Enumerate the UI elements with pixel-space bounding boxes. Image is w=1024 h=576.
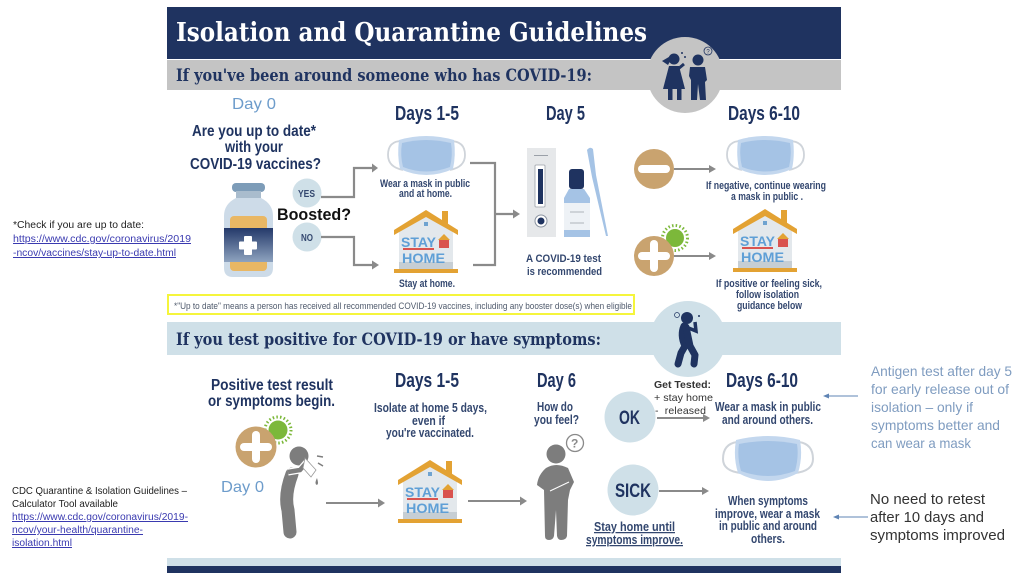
caption: if positive: follow isolation [736,289,799,301]
caption: how do you feel: How do [537,400,573,414]
caption: when symptoms improve: in public and around [719,519,817,533]
icon: stay home house: HOME [741,249,784,265]
icon: negative result [634,149,674,189]
side note: check up to date: *Check if you are up to date: [13,220,144,231]
annotation: get tested: + stay home [654,392,713,404]
caption: wear mask around others [715,400,821,427]
arrow: to isolate [326,498,385,508]
caption: test recommended: A COVID-19 test [526,253,601,265]
question: up to date: COVID-19 vaccines? [190,156,321,173]
heading: Days 6-10: Days 6-10 [728,103,800,125]
icon: positive result with virus [634,226,688,276]
caption: isolate at home [374,401,487,440]
section heading: exposed to COVID-19: If you've been around someone who has COVID-19: [176,66,592,85]
caption: how do you feel: you feel? [534,413,579,427]
footer band [167,558,841,573]
arrow: to day 6 [468,496,527,506]
caption: isolate at home: even if [412,414,446,428]
caption: if positive [716,278,822,312]
annotation: get tested [654,379,713,417]
annotation: get tested: Get Tested: [654,379,711,391]
callout: up to date definition [168,295,634,314]
icon: positive with virus [236,417,291,468]
icon: stay home house [398,460,462,523]
side note: calculator tool: isolation.html [12,538,72,549]
callout: up to date definition: *"Up to date" means a person has received all recommended COVID-19 vaccines, including any booster dose(s) when eligible [174,301,632,312]
arrow: positive [674,252,716,260]
heading: positive test: Positive test result [211,377,333,394]
icon: coughing person [650,301,726,377]
icon: stay home house: HOME [402,250,445,266]
icon: stay home house [394,210,458,273]
caption: wear mask around others: Wear a mask in public [715,400,821,414]
badge: NO [292,222,322,252]
icon: sneezing person [287,446,323,532]
arrow: retest note [833,514,868,520]
caption: test recommended: is recommended [527,266,602,278]
question: up to date: Are you up to date* [192,123,317,140]
side note: no retest: after 10 days and [870,510,984,526]
question: up to date [190,123,321,173]
arrow: antigen note [823,394,858,398]
caption: when symptoms improve [715,494,820,546]
heading: Days 6-10: Days 6-10 [726,370,798,392]
label: Day 0: Day 0 [232,96,276,113]
side note: calculator tool: CDC Quarantine & Isolation Guidelines – [12,486,187,497]
caption: test recommended [526,253,602,278]
icon: thinking person [537,434,584,540]
icon: vaccine vial [224,183,273,277]
heading: positive test [208,377,335,410]
caption: when symptoms improve: others. [751,532,785,546]
icon: stay home house: STAY [401,234,437,250]
annotation: Boosted?: Boosted? [277,205,351,224]
caption: wear a mask: and at home. [399,188,452,200]
icon: mask [388,136,465,175]
side note: antigen test: Antigen test after day 5 [871,363,1012,379]
heading: Days 1-5: Days 1-5 [395,370,459,392]
heading: positive test: or symptoms begin. [208,393,335,410]
icon: stay home house: HOME [406,500,449,516]
annotation: get tested: - released [655,405,706,417]
caption: isolate at home: Isolate at home 5 days, [374,401,487,415]
side note: no retest [870,492,1005,544]
section heading: test positive: If you test positive for COVID-19 or have symptoms: [176,330,601,349]
caption: how do you feel [534,400,579,427]
side note: antigen test: symptoms better and [871,417,1000,433]
badge: YES [292,178,322,208]
icon: stay home house: STAY [405,484,441,500]
arrow: no to stay home [321,237,379,270]
badge: NO: NO [301,232,313,244]
caption: stay home until [586,520,683,547]
heading: Day 6: Day 6 [537,370,576,392]
icon: stay home house [733,209,797,272]
side note: check up to date [13,220,191,259]
side note: calculator tool [12,486,188,549]
question: up to date: with your [224,139,283,156]
caption: if negative: a mask in public . [731,191,803,203]
badge: SICK [608,464,658,516]
arrow: sick [659,487,709,495]
heading: Days 1-5: Days 1-5 [395,103,459,125]
icon: large mask [723,436,813,481]
caption: if negative: If negative, continue wearing [706,180,826,192]
icon: two people coughing [647,37,723,113]
icon: two people coughing: ? [706,50,710,56]
side note: calculator tool: ncov/your-health/quarantine- [12,525,143,536]
icon: stay home house: STAY [740,233,776,249]
caption: if negative [706,180,826,203]
side note: no retest: symptoms improved [870,528,1005,544]
badge: OK [604,392,656,442]
title banner: Isolation and Quarantine Guidelines [176,18,647,48]
heading: Day 5: Day 5 [546,103,585,125]
badge: SICK: SICK [615,481,651,502]
caption: isolate at home: you're vaccinated. [386,426,474,440]
section heading: exposed to COVID-19 [167,60,841,90]
arrow: negative [674,165,716,173]
section heading: test positive [167,322,841,355]
title banner [167,7,841,59]
side note: calculator tool: https://www.cdc.gov/coronavirus/2019- [12,512,188,523]
badge: YES: YES [298,188,315,200]
side note: calculator tool: Calculator Tool available [12,499,118,510]
arrow: yes to mask [321,164,378,197]
label: Day 0: Day 0 [221,479,264,496]
caption: stay at home: Stay at home. [399,278,455,290]
arrow: ok [657,414,710,422]
caption: when symptoms improve: When symptoms [728,494,808,508]
caption: when symptoms improve: improve, wear a mask [715,507,820,521]
caption: wear a mask: Wear a mask in public [380,178,470,190]
side note: antigen test: for early release out of [871,381,1009,397]
icon: thinking person: ? [571,436,578,450]
caption: if positive: guidance below [737,300,802,312]
side note: antigen test [871,363,1012,451]
side note: antigen test: can wear a mask [871,435,972,451]
side note: check up to date: -ncov/vaccines/stay-up-to-date.html [13,248,176,259]
arrow: bracket to test [470,163,520,265]
caption: stay home until: symptoms improve. [586,533,683,547]
side note: check up to date: https://www.cdc.gov/coronavirus/2019 [13,234,191,245]
badge: OK: OK [619,408,640,429]
caption: stay home until: Stay home until [594,520,675,534]
caption: wear mask around others: and around others. [722,413,813,427]
caption: wear a mask [380,178,470,200]
icon: COVID test kit [527,148,608,237]
side note: antigen test: isolation – only if [871,399,973,415]
caption: if positive: If positive or feeling sick, [716,278,822,290]
icon: mask [727,136,804,175]
side note: no retest: No need to retest [870,492,985,508]
